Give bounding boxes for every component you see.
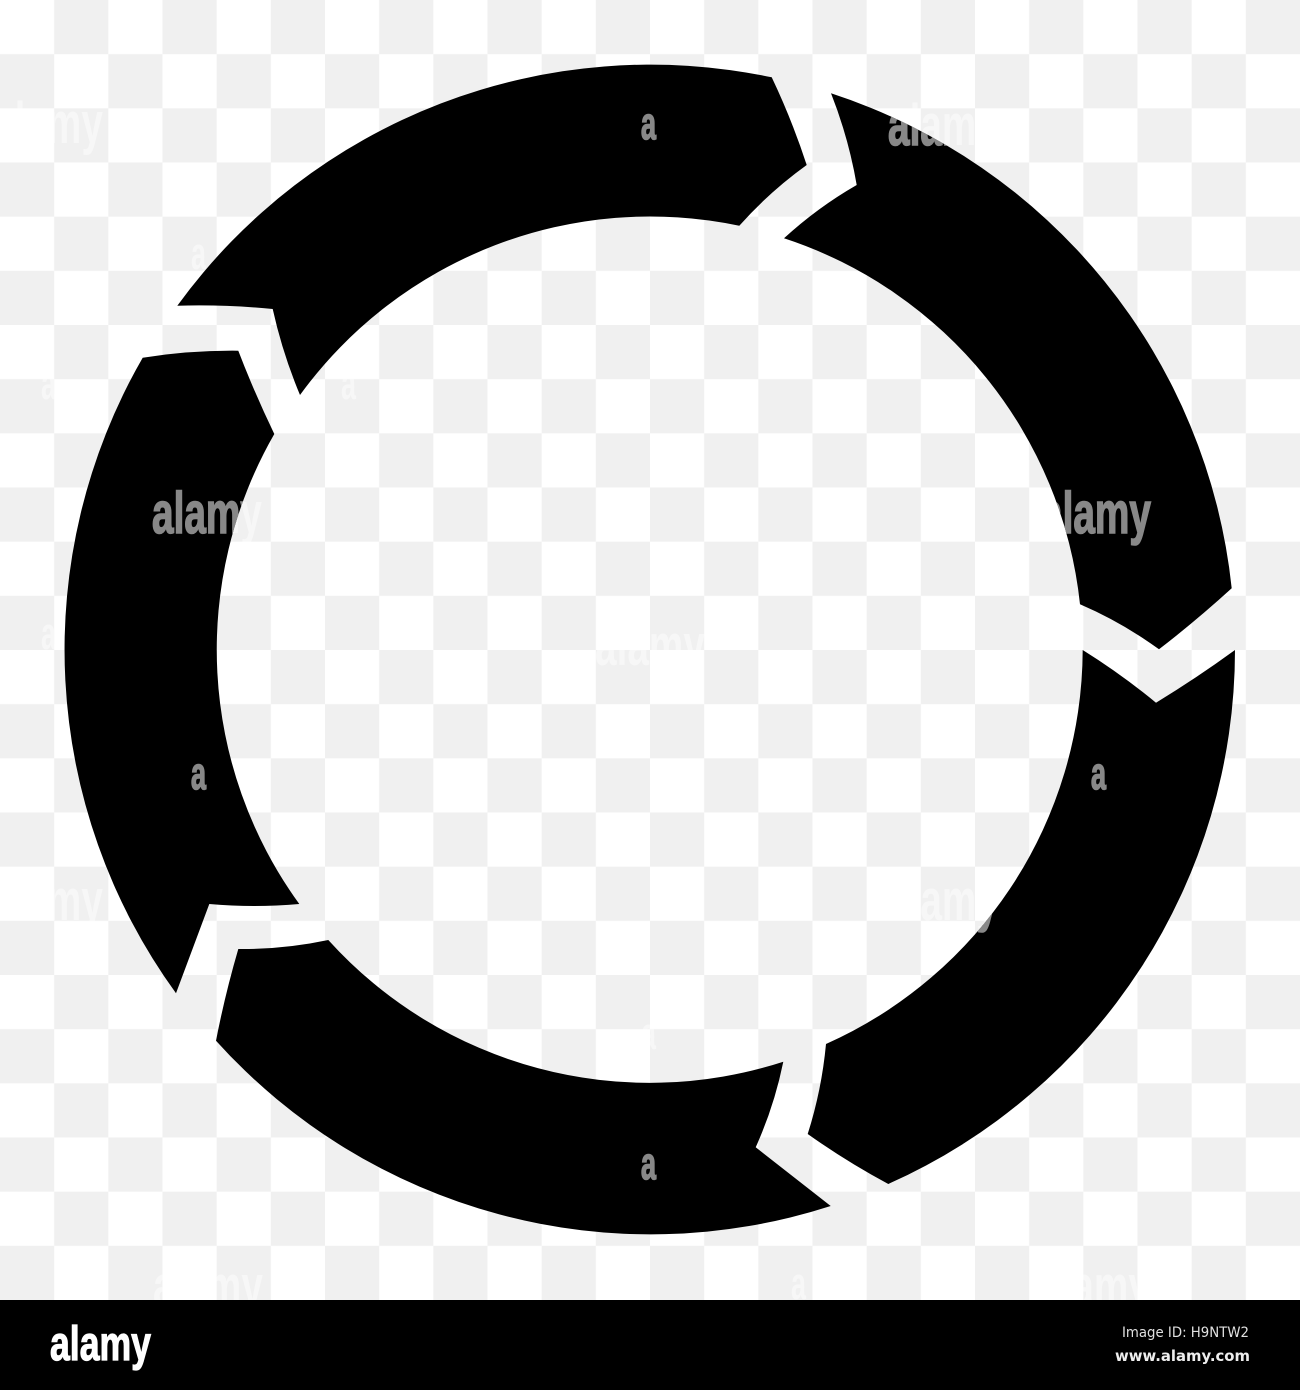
faint watermarks on background [0,91,1151,1319]
arrow segment: right lower [808,650,1235,1184]
website url: www.alamy.com [1115,1347,1250,1365]
grey watermarks over ring: a [1091,748,1107,799]
arrow segment: top [177,65,807,395]
faint watermarks on background: a [641,1008,657,1059]
footer bar [0,1300,1300,1390]
grey watermarks over ring: alamy [888,868,998,933]
faint watermarks on background: alamy [888,868,998,933]
faint watermarks on background: alamy [153,1254,263,1319]
image id: Image ID: H9NTW2 [1122,1325,1249,1341]
faint watermarks on background: a [41,608,57,659]
faint watermarks on background: a [191,228,207,279]
faint watermarks on background: alamy [1040,1254,1150,1319]
grey watermarks over ring: alamy [1041,481,1151,546]
faint watermarks on background: a [41,358,57,409]
grey watermarks over ring: a [641,1138,657,1189]
faint watermarks on background: alamy [595,613,705,678]
circular arrow ring [65,65,1235,1234]
faint watermarks on background: alamy [1041,481,1151,546]
faint watermarks on background: a [341,358,357,409]
grey watermarks over ring: alamy [152,481,262,546]
grey watermarks over ring: a [191,748,207,799]
arrow segment: left [65,351,299,993]
grey watermarks over ring [152,93,1151,1189]
footer logo: alamy [50,1318,151,1371]
faint watermarks on background: a [791,1258,807,1309]
grey watermarks over ring: alamy [888,93,998,158]
grey watermarks over ring: a [641,98,657,149]
arrow segment: right upper [784,93,1232,649]
arrow segment: bottom [216,940,831,1234]
faint watermarks on background: alamy [152,481,262,546]
faint watermarks on background: alamy [888,93,998,158]
